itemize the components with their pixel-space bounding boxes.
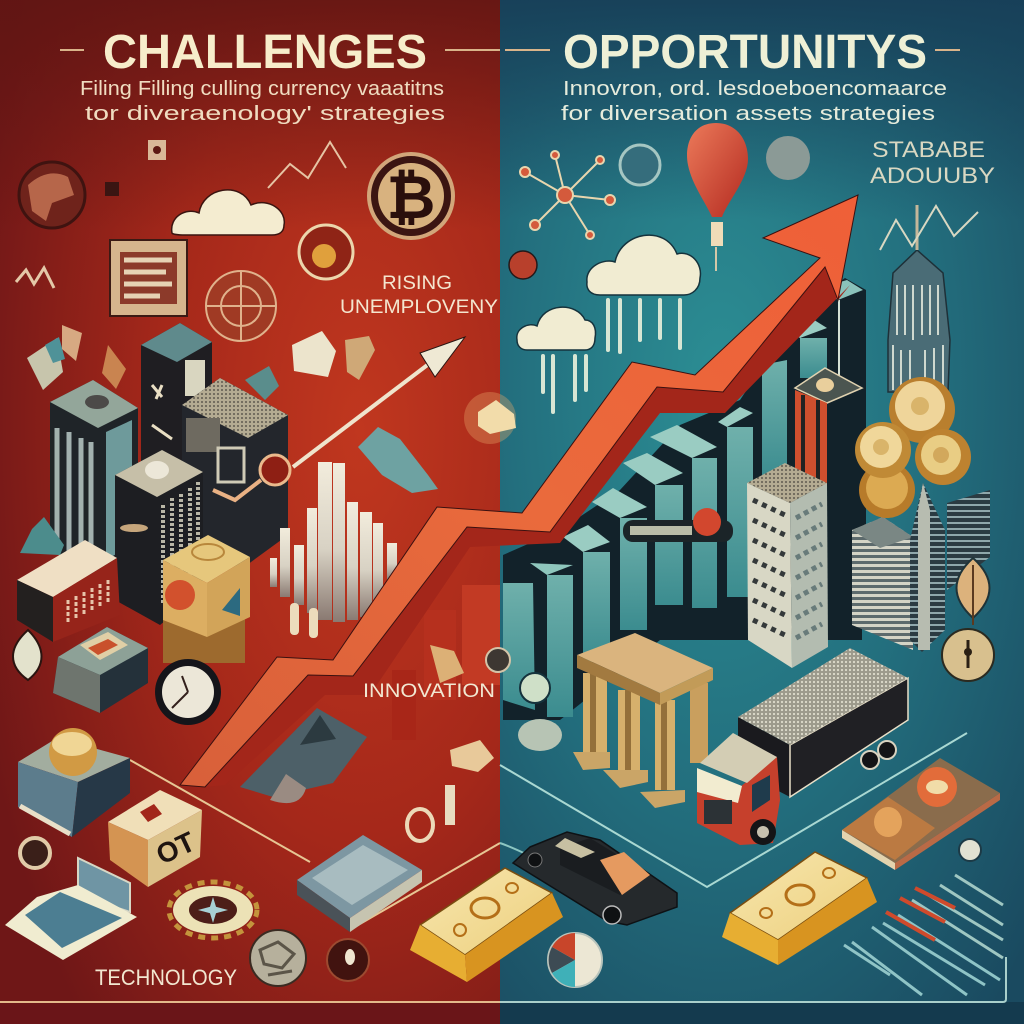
icon: chart card (110, 240, 187, 316)
bars: red columns behind arrow (392, 585, 500, 740)
main arrow (180, 195, 858, 787)
label: rising unemployment: RISING (382, 273, 452, 294)
label: technology: TECHNOLOGY (95, 965, 237, 990)
title rule marks (60, 49, 960, 51)
box: gold cube (163, 535, 250, 663)
icon: gold coins (855, 377, 971, 518)
icon: ring chip left (20, 838, 50, 868)
frame and road lines (0, 733, 1006, 1002)
main arrow underside (205, 267, 850, 787)
icon: gear (169, 882, 257, 938)
subtitle: challenges: Filing Filling culling currency vaaatitns (80, 78, 444, 100)
decorative zigzag line (268, 142, 346, 188)
subtitle: opportunities: Innovron, ord. lesdoeboencomaarce (563, 78, 947, 100)
icon: round badge (942, 629, 994, 681)
label: stable advisory (870, 137, 995, 188)
icon: stone coin (250, 930, 306, 986)
icon: leaf right (956, 558, 990, 625)
subtitle: opportunities: for diversation assets strategies (561, 103, 935, 125)
label: innovation: INNOVATION (363, 681, 495, 702)
label: rising unemployment: UNEMPLOVENY (340, 297, 498, 318)
icon: bitcoin coin (369, 154, 453, 238)
decorative lightning lines (880, 206, 978, 250)
icon: laptop (5, 858, 137, 960)
label: stable advisory: ADOUUBY (870, 163, 995, 188)
thin arrow (293, 337, 465, 467)
title: challenges: CHALLENGES (103, 26, 427, 79)
chart stripes bottom right (844, 875, 1003, 995)
icon: pie gauge (548, 933, 602, 987)
icon: cloud with rain large (587, 235, 700, 352)
icon: small clipboard marks (105, 140, 166, 196)
box: OT cube (108, 790, 202, 887)
building: white office tower (747, 463, 828, 668)
building: server block (182, 378, 288, 570)
icon: ring connector (213, 455, 290, 500)
icon: dark mouse shape (240, 708, 367, 803)
small figure shape (358, 427, 438, 493)
building: front tower (115, 450, 203, 625)
icon: globe (19, 162, 85, 228)
icon: key pin (623, 508, 733, 542)
subtitle: challenges: tor diveraenology' strategies (85, 103, 445, 125)
building: striped office (852, 517, 913, 650)
decorative left wave (16, 268, 54, 288)
icon: small red sphere (509, 251, 537, 279)
subtitle: opportunities (561, 78, 947, 125)
icon: gold bar left (410, 868, 563, 982)
bar chart: striped (270, 462, 397, 622)
building: spire tower (910, 483, 990, 652)
icon: gold medallion (299, 225, 353, 279)
icon: round chip right (959, 839, 981, 861)
building: skyscraper (888, 205, 950, 392)
icon: cloud left (172, 190, 284, 235)
label: rising unemployment (340, 273, 498, 318)
icon: book right (842, 758, 1000, 870)
box: OT cube: OT (151, 826, 200, 870)
icon: network (520, 151, 615, 239)
icon: small discs center (407, 645, 562, 841)
label: stable advisory: STABABE (872, 137, 985, 162)
subtitle: challenges (80, 78, 445, 125)
small capsules (290, 603, 318, 638)
icon: dotted globe (766, 136, 810, 180)
icon: dark sphere (327, 939, 369, 981)
title: opportunities: OPPORTUNITYS (563, 26, 927, 79)
bars: teal columns (503, 278, 866, 720)
icon: cloud with rain small (517, 307, 596, 412)
building: red-panel tower (795, 368, 862, 640)
small icon fragments left (27, 325, 375, 400)
box: red crate (17, 540, 120, 642)
box: dark device (53, 627, 148, 713)
icon: target dial (206, 271, 276, 341)
icon: ring circle (620, 145, 660, 185)
icon: leaf left (13, 630, 42, 680)
icon: bitcoin coin: ₿ (387, 164, 435, 231)
icon: temple (573, 633, 713, 808)
box: isometric dark safe (18, 728, 130, 837)
icon: balloon (687, 123, 748, 271)
icon: tablet (297, 835, 422, 932)
icon: truck (697, 648, 908, 845)
building: left tower (50, 380, 138, 582)
small note icon (464, 392, 516, 444)
panel: challenges background (0, 0, 500, 1024)
icon: clock (155, 659, 221, 725)
icon: gold bar right (722, 852, 877, 965)
building: black tower (141, 323, 212, 500)
panel: opportunities background (500, 0, 1024, 1024)
icon: car (513, 832, 677, 925)
icon: teal shard (20, 517, 64, 555)
